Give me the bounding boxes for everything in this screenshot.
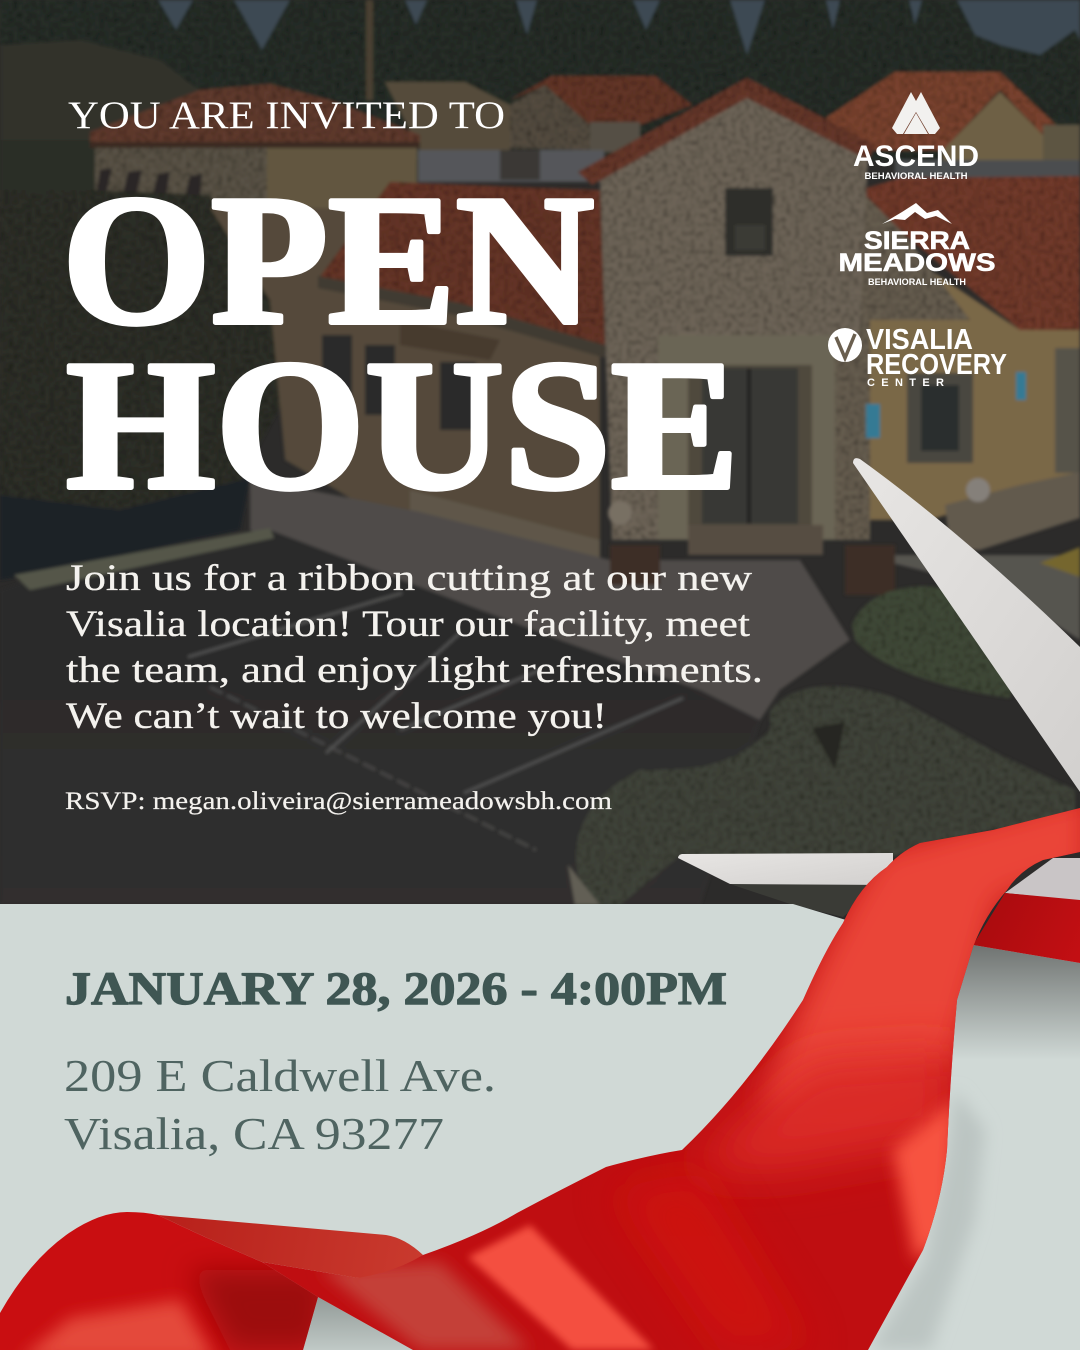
logo: sierra meadows behavioral health: SIERRA <box>864 227 970 255</box>
right wall <box>868 272 1080 522</box>
logo: ascend behavioral health: BEHAVIORAL HEALTH <box>864 171 968 181</box>
left ribbon shadow <box>303 1297 413 1350</box>
tan wall <box>210 190 600 545</box>
low planter walls <box>945 472 1080 550</box>
title: open house: HOUSE <box>66 322 739 528</box>
title: open house <box>62 158 739 528</box>
logo: sierra meadows behavioral health: MEADOWS <box>838 249 996 277</box>
logo: visalia recovery center: VISALIA <box>866 324 973 356</box>
brown trees top left <box>0 39 196 140</box>
back gable building <box>510 76 692 125</box>
sky <box>157 0 1080 56</box>
tan building behind <box>385 82 510 150</box>
body description: Visalia location! Tour our facility, meet <box>66 604 751 645</box>
right lower roof <box>860 176 1080 330</box>
body description: We can’t wait to welcome you! <box>66 696 607 737</box>
tree line <box>0 0 1080 160</box>
logo: visalia recovery center: RECOVERY <box>866 349 1007 381</box>
stone gable <box>600 92 868 540</box>
scissors: upper blade <box>853 458 1080 792</box>
ribbon: rear strip <box>973 893 1080 963</box>
left building roof <box>90 84 420 145</box>
scissors shadow on panel <box>850 920 1080 1070</box>
event address: Visalia, CA 93277 <box>64 1108 444 1159</box>
parking lot <box>272 531 760 904</box>
event date and time: JANUARY 28, 2026 - 4:00PM <box>65 963 727 1015</box>
center roof <box>320 182 605 345</box>
left trees <box>0 190 277 508</box>
logo: ascend behavioral health <box>853 92 979 181</box>
shrubs <box>576 586 1075 905</box>
ribbon: left loop <box>0 1212 318 1350</box>
logo: visalia recovery center <box>828 324 1007 389</box>
scissors: lower blade <box>678 853 1080 917</box>
invitation line: YOU ARE INVITED TO <box>68 94 505 137</box>
ribbon: inner fold <box>158 1215 423 1278</box>
ribbon shadow <box>870 1090 985 1350</box>
right back roof <box>826 72 1056 150</box>
body description <box>66 558 763 737</box>
logo: sierra meadows behavioral health: BEHAVIORAL HEALTH <box>868 277 966 287</box>
bottom information panel <box>0 904 1080 1350</box>
entrance <box>658 335 835 540</box>
body description: the team, and enjoy light refreshments. <box>66 650 763 691</box>
event address: 209 E Caldwell Ave. <box>64 1050 496 1101</box>
concrete path <box>248 482 850 721</box>
logo: ascend behavioral health: ASCEND <box>853 140 979 173</box>
logo: sierra meadows behavioral health <box>838 203 996 287</box>
background photo: building and parking lot <box>0 0 1080 905</box>
logo: visalia recovery center: CENTER <box>867 377 944 389</box>
title: open house: OPEN <box>62 158 594 364</box>
grey flat roof <box>418 150 604 182</box>
rsvp line: RSVP: megan.oliveira@sierrameadowsbh.com <box>65 788 613 815</box>
ribbon: main band <box>250 790 1080 1350</box>
event address <box>64 1050 496 1159</box>
dark street and cars left <box>0 478 250 580</box>
body description: Join us for a ribbon cutting at our new <box>66 558 752 599</box>
